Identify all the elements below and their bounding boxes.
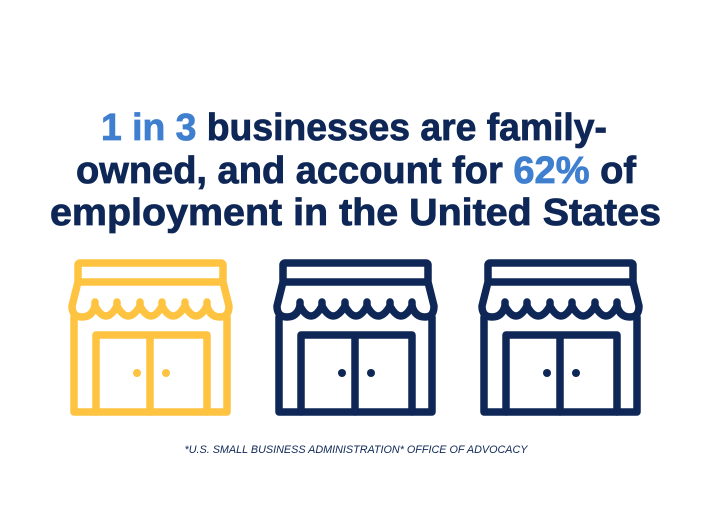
icon: yellow store xyxy=(72,263,229,412)
title: owned, and account for 62% of xyxy=(76,150,636,192)
icon: navy store 2 xyxy=(482,263,639,412)
title: employment in the United States xyxy=(50,192,661,234)
icon: navy store 1 xyxy=(277,263,434,412)
title xyxy=(50,107,661,234)
title: 1 in 3 businesses are family- xyxy=(101,107,607,149)
source footnote: *U.S. SMALL BUSINESS ADMINISTRATION* OFFICE OF ADVOCACY xyxy=(184,444,528,456)
